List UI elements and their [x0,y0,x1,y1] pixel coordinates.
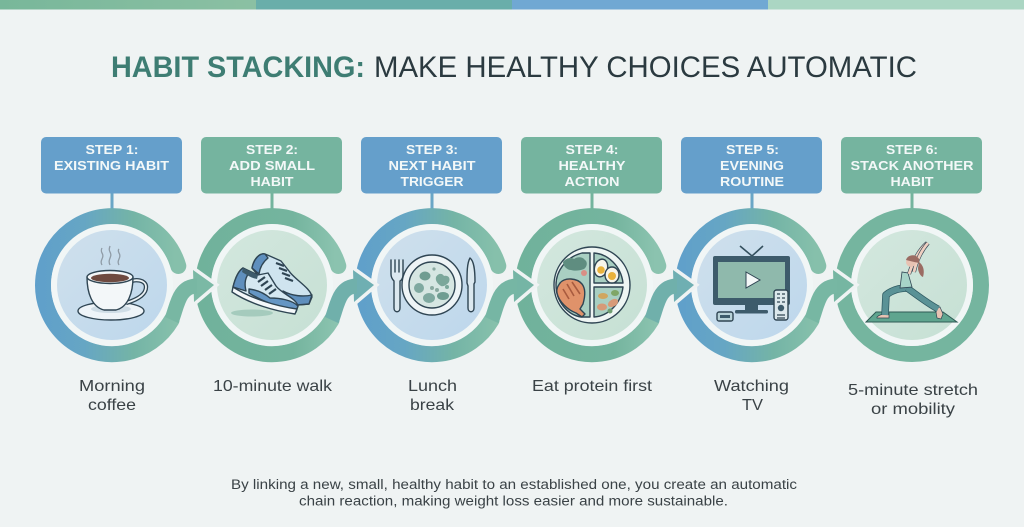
step 4 ring [523,216,658,354]
step 2 label box: HABIT [250,174,294,189]
step 2 text: 10-minute walk [213,378,333,395]
step 2 label box: ADD SMALL [229,158,315,173]
step 6 text: 5-minute stretch [848,382,978,399]
step 5 label box: EVENING [720,158,784,173]
step 5 text [714,378,789,414]
step 3 text: break [410,397,455,414]
step 3 label box [361,137,502,210]
step 1 text: coffee [88,397,136,414]
step 1 label box: STEP 1: [86,142,138,157]
step 6 text: or mobility [871,401,955,418]
step 5 [681,137,822,414]
step 5 disc [691,224,813,346]
step 4 label box: HEALTHY [558,158,626,173]
step 6 disc [851,224,973,346]
step 6 [841,137,982,418]
step 6 label box: STACK ANOTHER [850,158,974,173]
step 3 label box: STEP 3: [406,142,458,157]
back shoe [252,254,312,305]
step 6 label box [841,137,982,210]
step 5 label box: STEP 5: [726,142,779,157]
icon: divided plate [554,247,630,323]
step 2 label box [201,137,342,210]
step 2 disc [211,224,333,346]
step 5 label box: ROUTINE [720,174,784,189]
icon: television with remote [713,246,790,321]
step 5 label box [681,137,822,210]
footer text [231,477,797,508]
step 5 ring [683,216,818,354]
step 1 label box [41,137,182,210]
icon: yoga pose [866,243,957,322]
step 6 ring [843,216,981,354]
footer text: By linking a new, small, healthy habit to an established one, you create an automatic [231,477,797,492]
arrow: step 5 to step 6 [812,270,854,320]
step 4 label box: STEP 4: [566,142,618,157]
step 3 text [408,378,457,414]
step 1 text: Morning [79,378,145,395]
step 3 ring [363,216,498,354]
arrow: step 4 to step 5 [652,270,694,320]
step 1 ring [43,216,178,354]
step 4 label box [521,137,662,210]
step 3 disc [371,224,493,346]
step 5 text: Watching [714,378,789,395]
step 4 disc [531,224,653,346]
icon: running shoes [231,254,312,316]
step 3 label box: TRIGGER [400,174,464,189]
step 3 label box: NEXT HABIT [388,158,476,173]
step 6 text [848,382,978,418]
arrow: step 2 to step 3 [332,270,374,320]
step 2 ring [203,216,338,354]
step 4 label box: ACTION [564,174,620,189]
step 2 label box: STEP 2: [246,142,298,157]
front shoe [232,268,298,314]
step 1 label box: EXISTING HABIT [54,158,169,173]
step 5 text: TV [742,397,763,414]
icon: coffee cup [78,246,146,320]
step 4 [521,137,662,395]
step 4 text: Eat protein first [532,378,653,395]
arrow: step 3 to step 4 [492,270,534,320]
top colour band [0,0,1024,10]
step 1 [41,137,182,414]
step 3 text: Lunch [408,378,457,395]
title: HABIT STACKING: [111,51,365,84]
title: MAKE HEALTHY CHOICES AUTOMATIC [374,51,917,84]
step 6 label box: STEP 6: [886,142,938,157]
step 1 disc [51,224,173,346]
step 6 label box: HABIT [890,174,934,189]
arrow: step 1 to step 2 [172,270,214,320]
footer text: chain reaction, making weight loss easier and more sustainable. [299,494,728,508]
icon: plate with fork and knife [391,255,475,315]
step 3 [361,137,502,414]
step 2 [201,137,342,395]
step 1 text [79,378,145,414]
